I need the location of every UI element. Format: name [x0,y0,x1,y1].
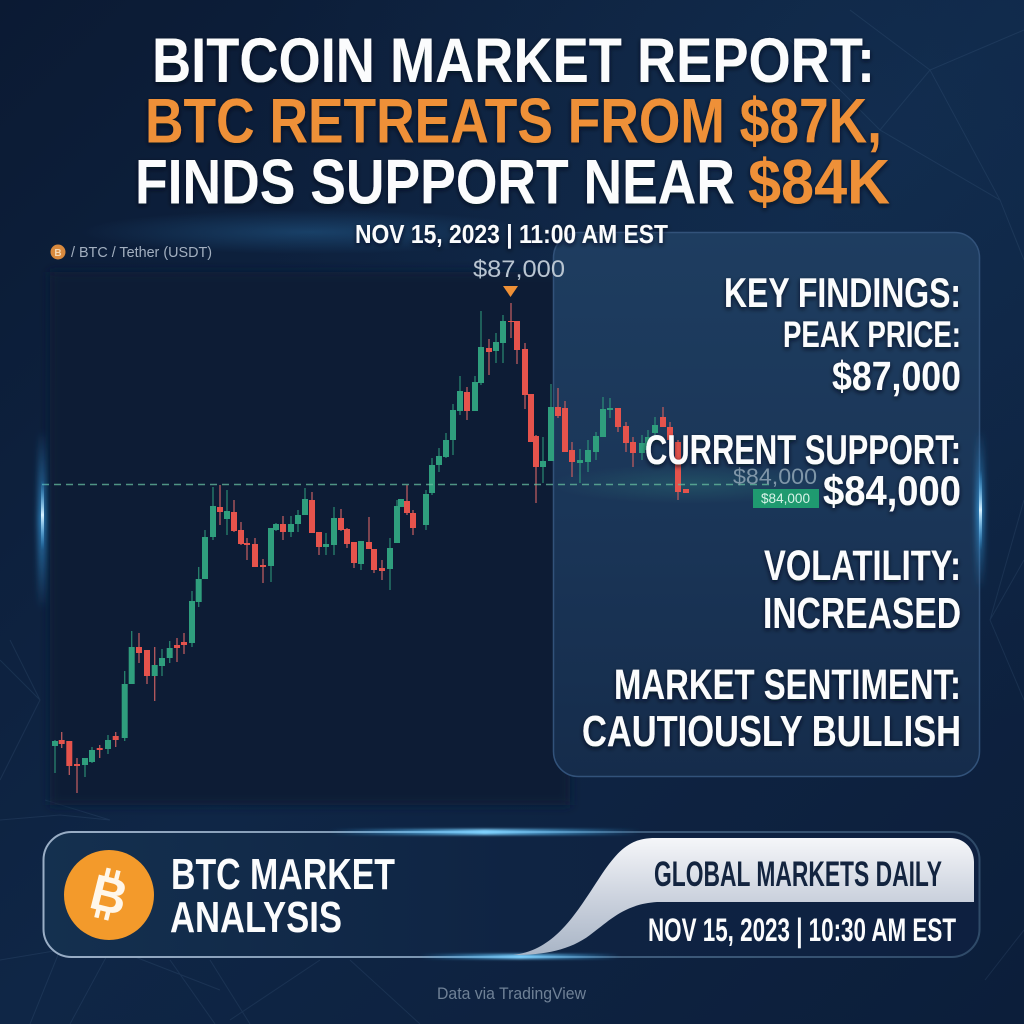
peak label and marker [473,256,565,297]
icon: bitcoin coin: B [85,863,133,927]
support price labels: $84,000 [733,464,817,489]
band heading: BTC MARKET [171,850,395,899]
peak label and marker: $87,000 [473,256,565,283]
candlestick chart [55,303,686,793]
key findings text: INCREASED [763,589,961,638]
support price labels [733,464,819,508]
source note: Data via TradingView [437,984,587,1003]
key findings text: PEAK PRICE: [783,314,961,355]
key findings text: VOLATILITY: [764,542,961,590]
chart pair label: B [54,248,62,259]
title: BITCOIN MARKET REPORT: [152,26,875,96]
support line [42,484,770,486]
support zone glow [550,464,830,504]
support price labels: $84,000 [761,491,810,506]
key findings text: $87,000 [832,353,961,399]
icon: bitcoin coin [64,850,154,940]
title: BTC RETREATS FROM $87K, [145,86,882,156]
chart pair label: / BTC / Tether (USDT) [71,245,212,261]
title: $84K [748,148,890,218]
band heading [170,850,395,942]
band heading: ANALYSIS [170,893,342,942]
bottom band [44,829,980,959]
left and right vertical glows [38,430,984,610]
title: FINDS SUPPORT NEAR [135,148,735,218]
chart area [50,272,570,805]
date line: NOV 15, 2023 | 11:00 AM EST [355,219,668,249]
key findings text [582,269,961,756]
title [135,26,890,218]
key findings text: $84,000 [823,467,961,514]
ribbon: global markets daily [513,838,974,955]
panel: key findings background [554,232,980,776]
